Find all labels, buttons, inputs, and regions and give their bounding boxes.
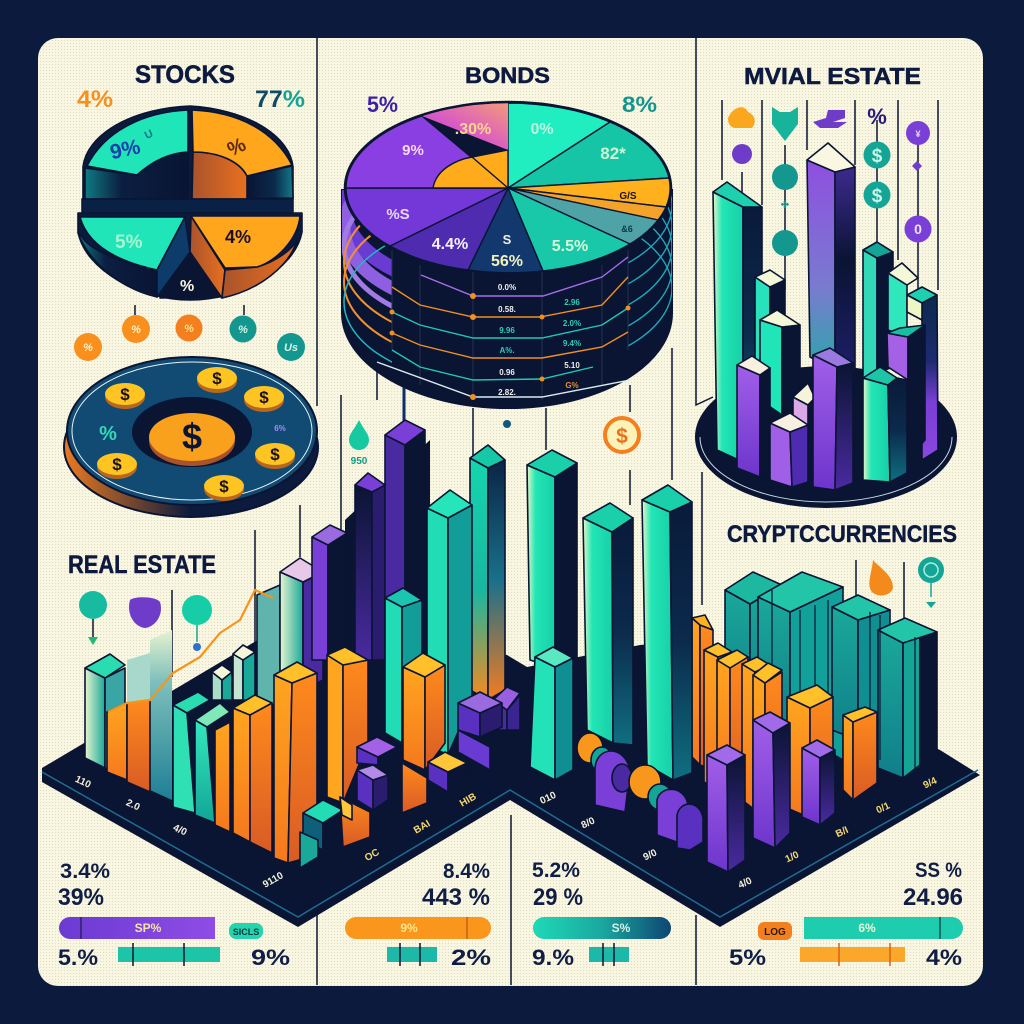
floor labels: right: 9/4 [922, 775, 939, 791]
legend row: pill bars: SP% [135, 921, 162, 935]
stat: stocks left percent: 4% [77, 86, 113, 113]
bonds pie labels: .30% [455, 121, 491, 138]
stocks pie labels: U [143, 128, 155, 142]
chart: coin disc: $ [259, 388, 269, 407]
floor labels: left [73, 774, 478, 891]
bonds pie labels: G/S [619, 191, 637, 202]
heading: bonds: BONDS [465, 63, 550, 88]
chart: coin disc: % [99, 423, 117, 445]
badges: stocks percent circles: % [83, 342, 93, 354]
chart: coin disc: $ [270, 445, 280, 464]
icons: mvial estate pictograms: $ [872, 186, 883, 207]
stocks pie labels: % [180, 278, 194, 295]
badges: stocks percent circles: % [131, 324, 141, 336]
stats block: third: 5.2% [532, 859, 580, 882]
bonds pie labels: A%. [499, 346, 515, 355]
bonds pie labels: %S [386, 206, 410, 223]
icon: teal drop [349, 420, 369, 467]
bonds pie labels: 0% [530, 121, 554, 138]
floor labels: right: 1/0 [784, 849, 801, 865]
floor labels: left: 9110 [261, 870, 286, 891]
stats block: real estate [58, 860, 110, 911]
stocks pie labels: 4% [225, 227, 251, 247]
icons: crypto pins [856, 557, 944, 618]
chart: coin disc: $ [112, 455, 122, 474]
stats block: second [422, 860, 490, 911]
tick markers [135, 305, 244, 315]
bonds pie labels: 0.0% [498, 283, 516, 292]
bonds pie labels: 5.5% [552, 238, 588, 255]
legend row: pill bars: 9% [400, 921, 418, 935]
connector: navy pin [400, 369, 410, 425]
legend row: small bars and percentages: 9.% [532, 945, 574, 970]
bar chart: crypto purple bars [707, 712, 835, 872]
legend row: pill bars: SICLS [233, 927, 259, 937]
bar chart: right cluster [527, 450, 937, 825]
floor labels: right: 010 [538, 790, 558, 807]
heading: cryptocurrencies: CRYPTCCURRENCIES [727, 521, 957, 548]
floor labels: right [538, 775, 939, 891]
bonds pie labels: 9% [402, 142, 424, 159]
chart base: mvial estate ellipse [695, 366, 957, 508]
chart: coin disc: $ [182, 416, 202, 457]
bonds pie labels: 5.10 [564, 361, 580, 370]
bonds pie labels: 2.82. [498, 388, 516, 397]
stocks pie labels: % [224, 134, 250, 161]
bonds pie labels: 56% [491, 253, 523, 270]
bonds data lines [377, 250, 630, 400]
icon: orange dollar ring: $ [616, 425, 628, 448]
line chart: orange trend [108, 590, 273, 712]
bonds pie labels: 2.0% [563, 319, 581, 328]
badges: stocks percent circles: % [184, 323, 194, 335]
legend row: small bars and percentages: 4% [926, 945, 962, 970]
chart: coin disc: $ [212, 369, 222, 388]
chart: coin disc: 6% [274, 424, 286, 433]
stats block: fourth: 24.96 [903, 884, 963, 911]
mvial estate connectors [722, 100, 938, 290]
stat: bonds right percent: 8% [622, 92, 657, 117]
stats block: fourth [903, 859, 963, 911]
icon: teal drop: 950 [351, 456, 368, 467]
legend row: small bars and percentages: 5.% [58, 945, 98, 970]
connector lines [172, 348, 702, 697]
bonds pie labels: G% [565, 381, 579, 390]
bonds pie labels: 82* [600, 144, 626, 163]
stats block: real estate: 39% [58, 884, 104, 911]
heading: stocks: STOCKS [135, 61, 235, 89]
legend row: pill bars: S% [612, 921, 631, 935]
icons: real estate pins [79, 591, 212, 651]
floor labels: right: 8/0 [580, 815, 597, 831]
chart: bonds layered pie [342, 102, 672, 408]
badges: stocks percent circles: Us [284, 342, 298, 354]
bonds pie labels: 9.96 [499, 326, 515, 335]
icons: mvial estate pictograms [728, 104, 932, 256]
floor labels: left: BAI [412, 818, 433, 837]
legend row: pill bars [59, 917, 963, 940]
chart: coin disc: $ [219, 477, 229, 496]
floor labels: right: 0/1 [875, 800, 892, 816]
legend row: pill bars: 6% [858, 921, 876, 935]
icons: mvial estate pictograms: ¥ [915, 129, 921, 139]
chart: coin disc: $ [120, 385, 130, 404]
bonds pie labels: 9.4% [563, 339, 581, 348]
floor labels: right: 4/0 [737, 875, 754, 891]
floor labels: left: HIB [458, 791, 478, 810]
bonds pie labels: &6 [621, 224, 633, 234]
legend row: pill bars: LOG [764, 927, 786, 938]
icons: mvial estate pictograms: ✤ [781, 200, 789, 211]
bonds pie labels: S [503, 232, 512, 247]
stocks pie labels: 9% [108, 135, 143, 164]
stocks pie labels [108, 128, 251, 295]
bonds pie labels: 0.58. [498, 305, 516, 314]
legend row: small bars and percentages: 9% [251, 945, 290, 970]
stats block: second: 443 % [422, 884, 490, 911]
bonds pie labels [386, 121, 637, 397]
floor labels: right: 9/0 [642, 847, 659, 863]
chart: stocks split pie [78, 106, 302, 300]
legend row: small bars and percentages [58, 943, 962, 970]
bonds pie labels: 2.96 [564, 298, 580, 307]
icons: mvial estate pictograms: % [867, 104, 887, 129]
stats block: real estate: 3.4% [60, 860, 110, 883]
floor labels: left: 2.0 [124, 798, 142, 814]
badges: stocks percent circles [74, 314, 305, 361]
stats block: third [532, 859, 583, 911]
floor labels: left: 4/0 [171, 823, 189, 839]
floor labels: right: B/I [834, 825, 851, 840]
bonds pie labels: 0.96 [499, 368, 515, 377]
bar chart: left cluster [85, 420, 520, 868]
floor labels: left: 110 [73, 774, 93, 791]
legend row: small bars and percentages: 5% [729, 945, 766, 970]
stat: bonds left percent: 5% [367, 92, 398, 117]
stocks pie labels: 5% [115, 232, 143, 253]
icons: mvial estate pictograms: 0 [914, 221, 922, 237]
icon: orange dollar ring [605, 418, 639, 452]
icon: dot [503, 420, 511, 428]
heading: real estate: REAL ESTATE [68, 551, 216, 579]
icons: mvial estate pictograms: $ [872, 146, 883, 167]
stats block: second: 8.4% [443, 860, 490, 883]
stat: stocks right percent: 77% [255, 86, 305, 113]
floor labels: left: OC [363, 847, 381, 864]
chart: coin disc [64, 357, 318, 517]
stats block: fourth: SS % [915, 859, 962, 882]
legend row: small bars and percentages: 2% [451, 945, 491, 970]
bar chart: mvial estate bars [713, 143, 938, 490]
chart: crypto coin stack [577, 733, 703, 850]
badges: stocks percent circles: % [238, 324, 248, 336]
floor platform [42, 615, 980, 927]
bonds pie labels: 4.4% [432, 236, 468, 253]
heading: mvial estate: MVIAL ESTATE [744, 63, 921, 89]
stats block: third: 29 % [533, 884, 583, 911]
